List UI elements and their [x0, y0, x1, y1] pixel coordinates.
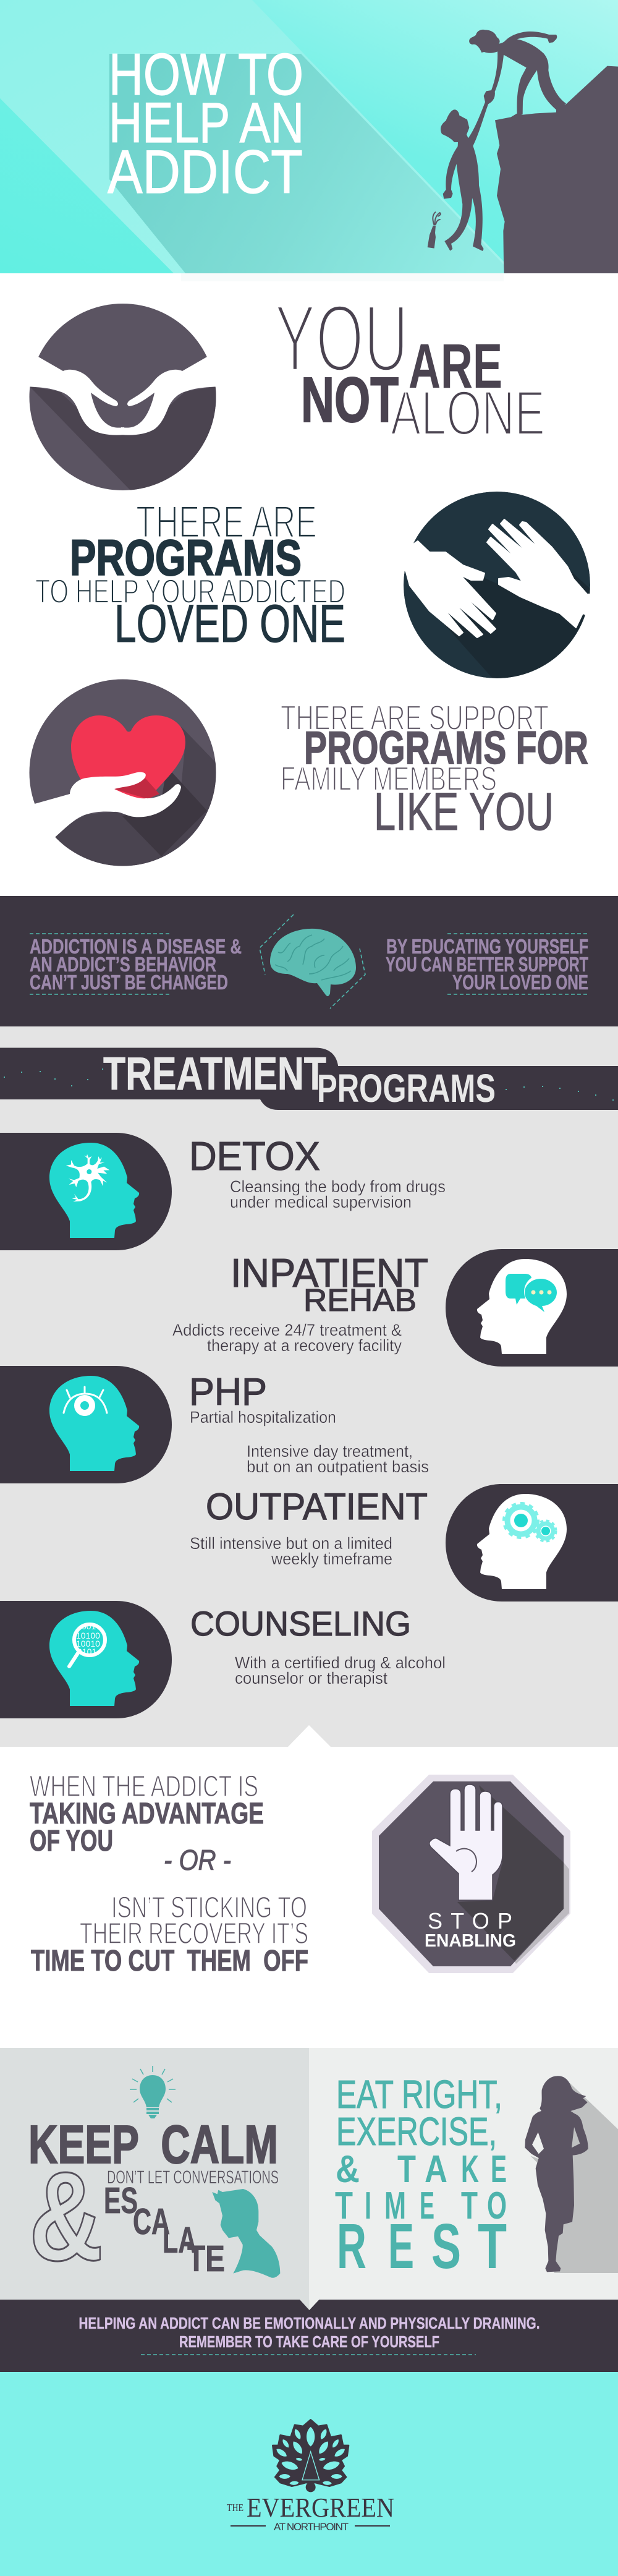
text block: stop enabling message: THEIR RECOVERY IT’S — [80, 1917, 308, 1950]
panel: take care callout — [0, 2300, 618, 2372]
icon: neuron — [66, 1154, 109, 1201]
headline: you are not alone: ARE — [408, 331, 502, 401]
description: under medical supervision — [230, 1193, 412, 1211]
icon: magnifier — [69, 1621, 105, 1666]
description: counselor or therapist — [235, 1669, 387, 1687]
icon: man silhouette — [212, 2189, 280, 2278]
description: Cleansing the body from drugs — [230, 1177, 446, 1196]
text: time to: I — [365, 2185, 371, 2227]
ampersand: & — [29, 2146, 103, 2287]
text: rest: T — [478, 2211, 507, 2282]
panel: addiction is a disease — [0, 896, 618, 1026]
sign text: STOP — [428, 1908, 512, 1934]
headline: there are programs: TO HELP YOUR ADDICTED — [35, 572, 345, 610]
headline: you are not alone — [274, 285, 545, 448]
headline: there are programs: PROGRAMS — [70, 530, 302, 586]
headline: there are programs: THERE ARE — [136, 497, 317, 547]
treatment heading: TREATMENT — [103, 1047, 326, 1099]
icon: magnifier: 10010 — [76, 1639, 100, 1648]
headline: support programs: LIKE YOU — [374, 782, 554, 842]
banner: treatment programs — [0, 1047, 618, 1111]
text block: stop enabling message: WHEN THE ADDICT IS — [30, 1770, 258, 1803]
panel: take care callout: REMEMBER TO TAKE CARE OF YOURSELF — [179, 2332, 439, 2351]
description: Addicts receive 24/7 treatment & — [172, 1321, 402, 1339]
text: time to: T — [461, 2185, 478, 2227]
text: time to: T — [335, 2185, 353, 2227]
description: Still intensive but on a limited — [190, 1534, 392, 1553]
text block: stop enabling message: ISN’T STICKING TO — [111, 1891, 307, 1924]
illustration: cliff and rescue — [428, 30, 618, 273]
text: and take: T — [397, 2148, 416, 2191]
icon: magnifier: 0101 — [77, 1647, 96, 1657]
program: inpatient rehab — [172, 1249, 618, 1367]
runner shadow — [530, 2083, 618, 2273]
headline: support programs: FAMILY MEMBERS — [281, 759, 497, 798]
text: time to: E — [420, 2185, 434, 2227]
icon: lotus tree — [273, 2420, 349, 2492]
text: eat right — [336, 2072, 502, 2154]
title — [231, 1250, 428, 1318]
icon: joined hands circle — [30, 304, 216, 490]
text: rest: S — [431, 2211, 461, 2282]
text: and take: & — [336, 2148, 360, 2191]
panel: grey treatment background — [0, 1026, 618, 1747]
subheading: DON’T LET CONVERSATIONS — [107, 2167, 279, 2188]
icon: magnifier: 001 — [82, 1621, 96, 1631]
description: therapy at a recovery facility — [207, 1336, 402, 1355]
description — [230, 1177, 446, 1211]
text: and take: K — [461, 2148, 479, 2191]
text block: stop enabling message: OF YOU — [30, 1825, 113, 1857]
hero panel — [0, 0, 618, 281]
text block: stop enabling message: TIME TO CUT THEM OFF — [31, 1945, 308, 1977]
title: REHAB — [303, 1282, 417, 1318]
program: counseling — [0, 1601, 446, 1718]
left text — [30, 935, 242, 994]
hero title: ADDICT — [108, 137, 303, 206]
arrow: triangle pointer — [287, 1725, 331, 1747]
heading: keep calm: KEEP CALM — [28, 2115, 278, 2175]
panel: keep calm — [0, 2048, 309, 2300]
headline: there are programs — [35, 497, 345, 654]
runner with shadow — [525, 2076, 618, 2273]
wordmark: AT NORTHPOINT — [274, 2521, 349, 2533]
icon: reaching hands circle — [396, 490, 596, 680]
text block: stop enabling message: - OR - — [164, 1844, 231, 1876]
text: rest: R — [337, 2211, 366, 2282]
program: detox — [0, 1133, 446, 1250]
icon: hand holding heart circle — [19, 679, 216, 866]
panel: footer — [0, 2372, 618, 2576]
wordmark: THE — [227, 2502, 243, 2514]
icon: speech bubbles — [506, 1274, 557, 1312]
description: Intensive day treatment, — [247, 1442, 413, 1461]
text: eat right: EXERCISE, — [336, 2109, 497, 2154]
cascading word: escalate: TE — [187, 2238, 225, 2279]
description: but on an outpatient basis — [247, 1457, 429, 1476]
icon: brain — [270, 929, 356, 996]
icon: magnifier: 10100 — [76, 1631, 100, 1640]
hero title — [108, 41, 304, 206]
left text: ADDICTION IS A DISEASE & — [30, 935, 242, 958]
title: PHP — [189, 1371, 267, 1414]
text: time to — [335, 2185, 507, 2227]
description — [172, 1321, 402, 1355]
program: outpatient — [190, 1484, 618, 1601]
hand — [430, 1785, 502, 1900]
headline: support programs — [281, 698, 588, 842]
hero title: HOW TO — [109, 41, 303, 108]
text block: stop enabling message: TAKING ADVANTAGE — [30, 1798, 264, 1830]
right text — [386, 935, 588, 994]
description — [190, 1534, 392, 1568]
description — [190, 1408, 429, 1476]
text: eat right: EAT RIGHT, — [336, 2072, 502, 2117]
text: time to: M — [384, 2185, 406, 2227]
icon: light bulb — [130, 2066, 176, 2118]
wordmark: EVERGREEN — [247, 2493, 394, 2523]
hero title: HELP AN — [109, 92, 304, 155]
text: and take — [336, 2148, 507, 2191]
logo: evergreen at northpoint — [227, 2420, 394, 2533]
left text: CAN’T JUST BE CHANGED — [30, 971, 228, 994]
description: Partial hospitalization — [190, 1408, 336, 1427]
description: weekly timeframe — [271, 1550, 392, 1568]
cascading word: escalate: LA — [163, 2220, 197, 2261]
cascading word: escalate: CA — [133, 2201, 170, 2242]
cascading word: escalate — [104, 2180, 225, 2279]
icon: runner silhouette — [525, 2076, 588, 2272]
title: COUNSELING — [190, 1604, 411, 1643]
headline: there are programs: LOVED ONE — [114, 594, 345, 654]
title: OUTPATIENT — [206, 1486, 428, 1527]
headline: you are not alone: YOU — [274, 285, 408, 391]
cascading word: escalate: ES — [104, 2180, 138, 2221]
title: INPATIENT — [231, 1250, 428, 1295]
headline: you are not alone: NOT — [301, 364, 399, 435]
icon: stop enabling sign — [373, 1776, 569, 1972]
icon: eye — [64, 1387, 107, 1413]
description: With a certified drug & alcohol — [235, 1653, 446, 1672]
left text: AN ADDICT’S BEHAVIOR — [30, 953, 216, 976]
icon: gears — [504, 1504, 556, 1541]
icon: stop enabling sign: ENABLING — [425, 1931, 516, 1951]
text: and take: E — [491, 2148, 507, 2191]
headline: you are not alone: ALONE — [391, 378, 545, 448]
description — [235, 1653, 446, 1687]
text: time to: O — [487, 2185, 507, 2227]
wordmark — [227, 2493, 394, 2533]
text: and take: A — [425, 2148, 447, 2191]
text: rest: E — [388, 2211, 414, 2282]
panel: eat right exercise — [309, 2048, 618, 2300]
program: php — [0, 1366, 429, 1483]
text block: stop enabling message — [30, 1770, 308, 1977]
programs heading: PROGRAMS — [317, 1066, 496, 1111]
title: DETOX — [189, 1133, 320, 1179]
text: rest — [337, 2211, 507, 2282]
